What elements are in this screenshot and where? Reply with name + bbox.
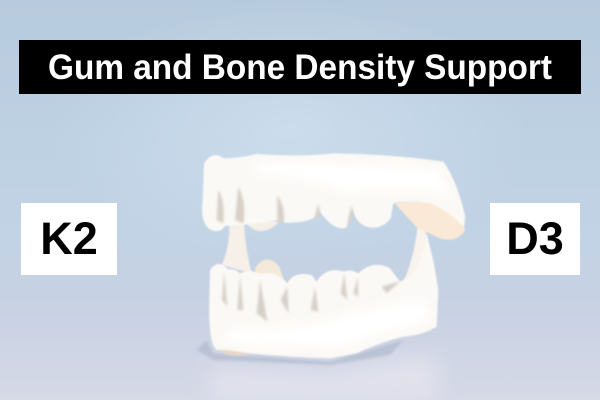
upper gum and teeth silhouette	[202, 153, 465, 231]
upper tooth gaps	[217, 187, 353, 227]
label: D3: D3	[506, 213, 564, 264]
upper jaw	[202, 153, 465, 240]
label: K2: K2	[40, 213, 98, 264]
title text: Gum and Bone Density Support	[48, 48, 552, 87]
lower jaw highlight	[223, 300, 432, 348]
title banner	[19, 40, 581, 94]
label: D3	[490, 203, 580, 275]
back connector struts	[222, 207, 435, 283]
lower gum and teeth silhouette	[209, 233, 438, 358]
dental model	[197, 153, 465, 400]
gum base warm edge	[217, 350, 250, 355]
lower tooth gaps	[222, 272, 400, 322]
upper gum highlight	[257, 162, 452, 197]
lower jaw	[209, 233, 438, 358]
upper flange underside	[395, 200, 465, 240]
label: K2	[21, 203, 117, 275]
floor shadow and reflection	[197, 340, 438, 400]
